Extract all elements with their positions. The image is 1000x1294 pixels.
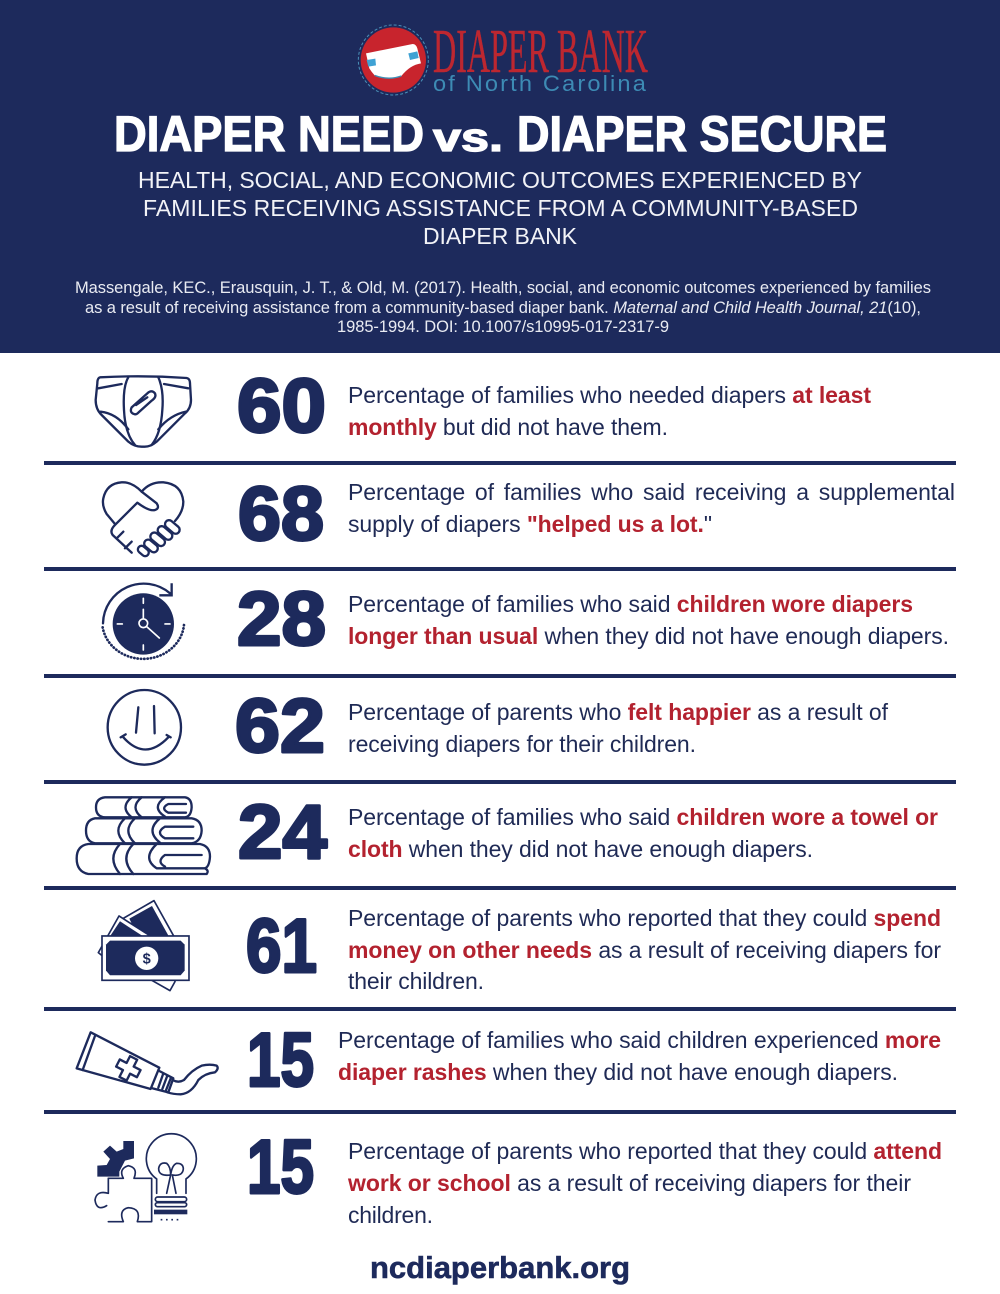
description: Percentage of families who said children wore a towel or: [348, 804, 938, 830]
subtitle: DIAPER BANK: [423, 223, 578, 249]
icon: smiley face: [108, 690, 181, 765]
title: vs.: [433, 116, 503, 160]
citation: 1985-1994. DOI: 10.1007/s10995-017-2317-9: [337, 318, 669, 336]
description: longer than usual when they did not have enough diapers.: [348, 623, 949, 649]
number: 24: [238, 790, 327, 875]
description: [347, 1138, 942, 1228]
description: Percentage of families who needed diapers at least: [348, 382, 871, 408]
description: [348, 905, 941, 994]
description: diaper rashes when they did not have enough diapers.: [338, 1059, 898, 1085]
description: receiving diapers for their children.: [348, 731, 696, 757]
citation: as a result of receiving assistance from a community-based diaper bank. Maternal and Child Health Journal, 21(10),: [85, 299, 921, 317]
icon: clock with circular arrow: [103, 583, 184, 659]
icon: stack of towels: [77, 797, 210, 874]
description: supply of diapers "helped us a lot.": [348, 511, 712, 537]
header panel: [0, 0, 1000, 353]
description: [348, 804, 938, 862]
title: [114, 106, 887, 162]
logo: of North Carolina: [433, 71, 648, 96]
icon: diaper with safety pin: [96, 376, 191, 447]
icon: ointment tube: [77, 1032, 218, 1094]
title: DIAPER NEED: [114, 106, 424, 162]
description: [348, 591, 949, 649]
footer website: ncdiaperbank.org: [370, 1250, 630, 1285]
description: [348, 479, 955, 537]
row 8: 15 percent: [95, 1125, 942, 1228]
description: their children.: [348, 968, 484, 994]
description: Percentage of families who said receiving a supplemental: [348, 479, 955, 505]
subtitle: FAMILIES RECEIVING ASSISTANCE FROM A COMMUNITY-BASED: [143, 195, 858, 221]
description: Percentage of parents who felt happier as a result of: [348, 699, 889, 725]
subtitle: [138, 167, 862, 249]
number: 15: [247, 1018, 314, 1103]
row 1: 60 percent: [96, 364, 871, 449]
title: DIAPER SECURE: [517, 106, 887, 162]
number: 28: [237, 577, 326, 662]
row 6: 61 percent: [98, 901, 941, 994]
row 2: 68 percent: [103, 472, 955, 558]
description: Percentage of families who said children wore diapers: [348, 591, 913, 617]
row 4: 62 percent: [108, 684, 889, 769]
description: children.: [348, 1202, 433, 1228]
description: [348, 699, 889, 757]
citation: Massengale, KEC., Erausquin, J. T., & Old, M. (2017). Health, social, and economic outcomes experienced by families: [75, 279, 931, 297]
icon: banknotes: $: [143, 952, 151, 968]
number: 68: [238, 472, 324, 557]
row 3: 28 percent: [103, 577, 949, 662]
logo: DIAPER BANK: [433, 18, 648, 86]
description: Percentage of families who said children experienced more: [338, 1027, 941, 1053]
description: money on other needs as a result of receiving diapers for: [348, 937, 941, 963]
number: 15: [247, 1125, 314, 1210]
description: work or school as a result of receiving diapers for their: [347, 1170, 911, 1196]
icon: gear, puzzle piece and light bulb: [95, 1134, 196, 1222]
citation: [75, 279, 931, 336]
icon: handshake heart: [103, 482, 183, 558]
description: Percentage of parents who reported that they could attend: [348, 1138, 942, 1164]
row 5: 24 percent: [77, 790, 938, 875]
number: 60: [237, 364, 326, 449]
subtitle: HEALTH, SOCIAL, AND ECONOMIC OUTCOMES EXPERIENCED BY: [138, 167, 862, 193]
description: [348, 382, 871, 440]
description: [338, 1027, 941, 1085]
row 7: 15 percent: [77, 1018, 941, 1103]
number: 62: [235, 684, 325, 769]
description: Percentage of parents who reported that they could spend: [348, 905, 941, 931]
icon: banknotes: [98, 901, 189, 991]
description: monthly but did not have them.: [348, 414, 668, 440]
number: 61: [246, 904, 317, 989]
logo: [358, 18, 648, 96]
description: cloth when they did not have enough diapers.: [348, 836, 813, 862]
